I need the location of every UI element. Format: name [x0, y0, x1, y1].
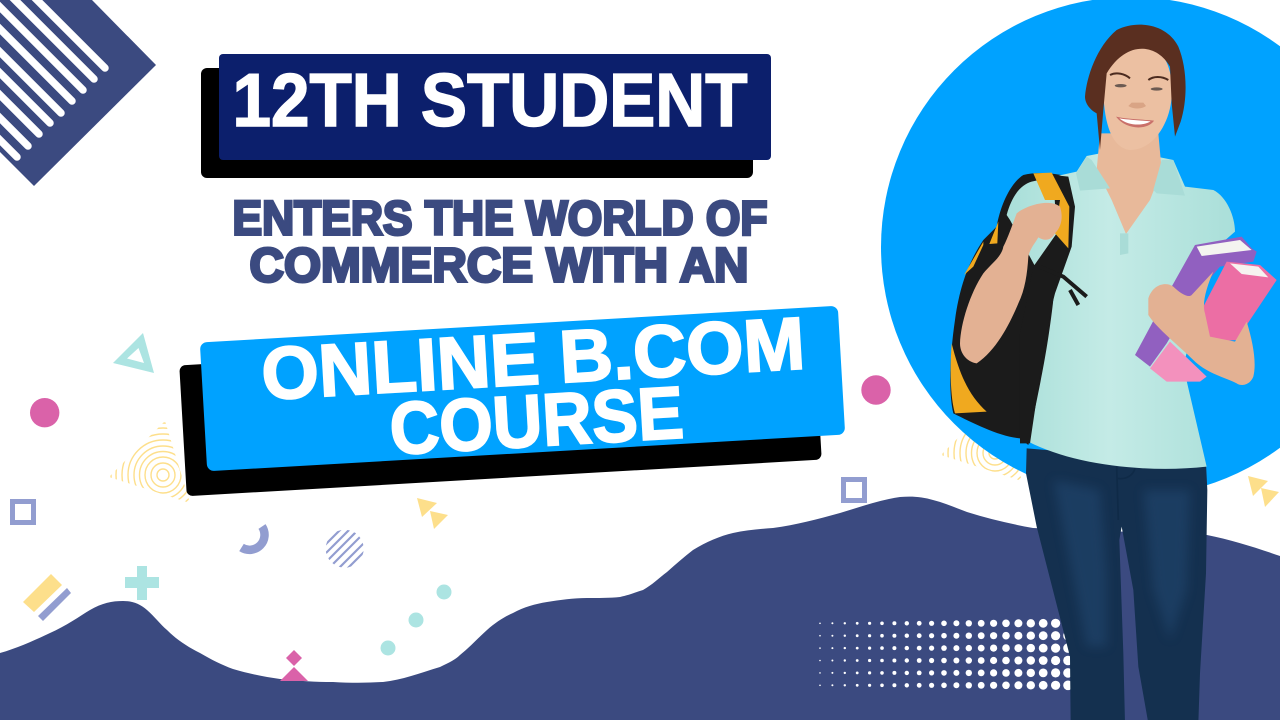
- teal outlined triangle: [113, 333, 154, 373]
- yellow strap: [1033, 173, 1069, 248]
- yellow and blue bars: [23, 574, 71, 621]
- halftone dot pattern: [819, 618, 1073, 690]
- hair: [1085, 25, 1186, 150]
- head: [1085, 25, 1186, 150]
- tilted banner: online b.com course: ONLINE B.COM: [259, 301, 807, 416]
- eyebrows: [1110, 73, 1168, 80]
- spiral decoration right: [943, 401, 1047, 505]
- neck: [1097, 133, 1162, 234]
- square outline left: [12, 502, 34, 522]
- spiral decoration left: [111, 423, 215, 527]
- purple book: [1135, 237, 1257, 367]
- title banner: 12th student: [201, 54, 771, 178]
- pink book: [1150, 262, 1277, 382]
- decorative corner diamond with stripes: [0, 0, 156, 186]
- blue circle behind student: [881, 0, 1280, 497]
- yellow arrows middle: [417, 498, 448, 529]
- tilted banner: online b.com course: COURSE: [387, 371, 686, 470]
- subtitle text: COMMERCE WITH AN: [250, 240, 748, 292]
- collar: [1076, 157, 1185, 196]
- right arm and hand: [1148, 272, 1255, 385]
- teal dots: [380, 584, 452, 656]
- crescent arc: [242, 526, 265, 550]
- upper body: [950, 25, 1277, 469]
- jeans: [1026, 448, 1207, 720]
- backpack strap: [1020, 175, 1075, 443]
- pink circle right: [861, 375, 891, 405]
- mouth: [1116, 117, 1154, 127]
- backpack: [950, 173, 1075, 445]
- square outline right: [844, 480, 864, 500]
- striped circle: [326, 530, 364, 568]
- strap buckle: [1040, 267, 1087, 305]
- pink circle left: [30, 398, 59, 427]
- eyes: [1115, 84, 1163, 91]
- nose shade: [1128, 103, 1146, 108]
- title banner: 12th student: 12TH STUDENT: [232, 58, 748, 142]
- shirt: [1007, 153, 1235, 469]
- face: [1103, 45, 1172, 150]
- yellow arrows right: [1248, 476, 1279, 507]
- teal plus: [125, 566, 159, 600]
- left arm and hand: [960, 203, 1062, 363]
- decorative shapes: [12, 333, 1279, 681]
- subtitle text: [232, 192, 768, 292]
- subtitle text: ENTERS THE WORLD OF: [232, 192, 768, 246]
- student photo illustration: [950, 25, 1277, 720]
- tilted banner: online b.com course: [179, 301, 845, 496]
- background wave: [0, 497, 1280, 720]
- pink diamond and triangle: [280, 650, 308, 681]
